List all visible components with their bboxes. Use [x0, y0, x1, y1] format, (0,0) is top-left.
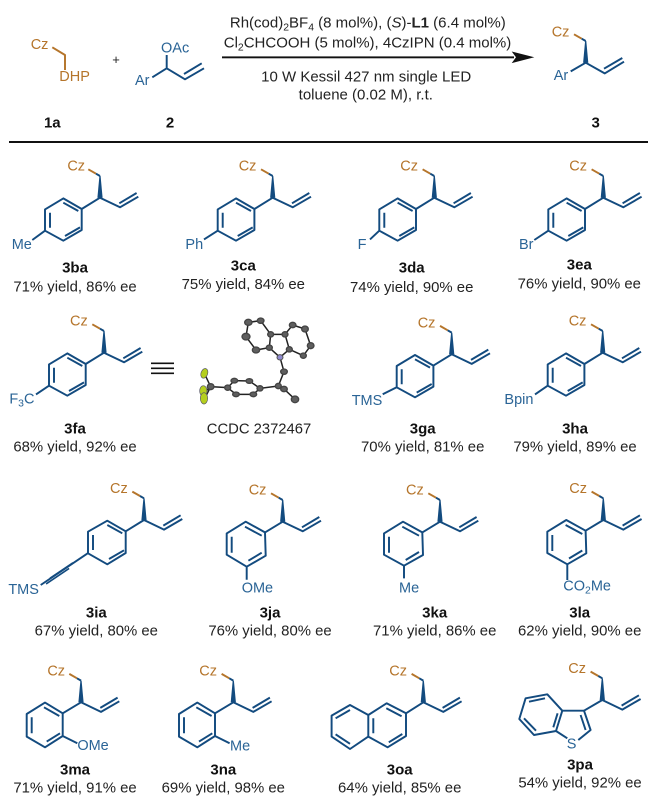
compound 3la: 62% yield, 90% ee	[518, 624, 641, 640]
compound 3ba: 3ba	[62, 259, 89, 276]
compound 3ca: Cz	[239, 159, 256, 175]
reaction conditions above arrow: S)-L1 (6.4 mol%)	[391, 15, 506, 32]
compound 3ma: 3ma	[60, 761, 91, 778]
compound 3ba: Me	[12, 237, 32, 253]
plus sign: +	[112, 52, 120, 67]
compound 3fa	[9, 314, 142, 456]
compound 3ja	[208, 483, 332, 640]
compound 3pa: 3pa	[567, 756, 594, 773]
compound 3fa: F	[9, 391, 18, 407]
compound 3na: 69% yield, 98% ee	[162, 781, 285, 797]
compound 3la: 2	[585, 586, 591, 597]
compound 3ba	[12, 159, 138, 296]
compound 3ja: Cz	[249, 483, 266, 499]
compound 3ea: Br	[519, 237, 534, 253]
compound 3pa: S	[567, 736, 576, 752]
reactant 2	[135, 41, 204, 132]
compound 3ea: 76% yield, 90% ee	[518, 276, 641, 292]
product 3	[552, 25, 624, 132]
reaction conditions above arrow	[224, 15, 511, 54]
compound 3ka: 3ka	[422, 605, 448, 622]
compound 3ma: 71% yield, 91% ee	[13, 781, 137, 797]
reactant 2: Ar	[135, 73, 150, 89]
divider rule	[9, 141, 648, 143]
reaction conditions above arrow: Cl	[224, 35, 238, 52]
compound 3ba: 71% yield, 86% ee	[13, 280, 137, 296]
compound 3ga: 70% yield, 81% ee	[361, 440, 484, 456]
crystal structure	[199, 318, 314, 437]
compound 3oa: 64% yield, 85% ee	[338, 781, 461, 797]
reaction conditions below arrow: 10 W Kessil 427 nm single LED	[261, 69, 471, 86]
compound 3na: Cz	[199, 663, 217, 679]
compound 3ia: 3ia	[86, 605, 107, 622]
reactant 1a: 1a	[44, 115, 61, 132]
compound 3oa: 3oa	[387, 761, 413, 778]
compound 3ia: Cz	[110, 481, 128, 497]
compound 3oa: Cz	[389, 663, 407, 679]
product 3: Cz	[552, 25, 569, 41]
compound 3ja: 76% yield, 80% ee	[208, 624, 332, 640]
compound 3ja: 3ja	[260, 605, 281, 622]
reaction conditions above arrow: 2	[238, 43, 244, 54]
compound 3la: CO	[563, 579, 585, 595]
compound 3oa	[332, 663, 462, 797]
compound 3ca: Ph	[185, 237, 203, 253]
equivalence symbol	[151, 363, 174, 373]
reaction arrow	[222, 52, 534, 63]
compound 3ea: Cz	[569, 159, 587, 175]
compound 3pa	[518, 661, 642, 792]
compound 3ka: Cz	[406, 483, 424, 499]
compound 3fa: 3fa	[64, 420, 86, 437]
compound 3ha: Bpin	[504, 392, 533, 408]
reaction conditions below arrow: toluene (0.02 M), r.t.	[299, 86, 433, 103]
compound 3fa: C	[24, 391, 34, 407]
compound 3na: Me	[230, 738, 250, 754]
compound 3da	[350, 159, 473, 296]
compound 3la	[518, 481, 642, 640]
compound 3ga: 3ga	[410, 420, 436, 437]
compound 3ha: Cz	[569, 314, 586, 330]
compound 3pa: 54% yield, 92% ee	[518, 776, 642, 792]
compound 3ka: Me	[399, 580, 419, 596]
compound 3fa: 3	[18, 398, 24, 409]
compound 3fa: 68% yield, 92% ee	[13, 440, 137, 456]
compound 3ca: 75% yield, 84% ee	[182, 277, 305, 293]
reactant 2: OAc	[161, 41, 189, 57]
compound 3ha: 3ha	[562, 420, 589, 437]
compound 3na: 3na	[210, 761, 237, 778]
compound 3da: F	[358, 237, 367, 253]
reaction conditions above arrow: (8 mol%), (	[314, 15, 391, 32]
compound 3da: Cz	[400, 159, 418, 175]
product 3: 3	[592, 115, 600, 132]
compound 3da: 74% yield, 90% ee	[350, 280, 473, 296]
compound 3la: Cz	[569, 481, 587, 497]
compound 3ha: 79% yield, 89% ee	[513, 440, 637, 456]
reactant 1a: Cz	[31, 37, 48, 53]
compound 3ga: TMS	[352, 393, 382, 409]
reaction conditions above arrow: CHCOOH (5 mol%), 4CzIPN (0.4 mol%)	[244, 35, 511, 52]
compound 3ca: 3ca	[231, 258, 256, 275]
reactant 1a	[31, 37, 90, 132]
crystal structure: CCDC 2372467	[207, 421, 311, 437]
reactant 2: 2	[166, 115, 174, 132]
compound 3ga: Cz	[418, 315, 435, 331]
compound 3ea	[518, 159, 642, 292]
compound 3ia: TMS	[8, 582, 39, 598]
compound 3la: Me	[591, 579, 611, 595]
compound 3ha	[504, 314, 641, 456]
compound 3na	[162, 663, 285, 797]
compound 3ka: 71% yield, 86% ee	[373, 624, 496, 640]
compound 3ga	[352, 315, 490, 456]
product 3: Ar	[554, 68, 568, 84]
compound 3pa: Cz	[568, 661, 586, 677]
compound 3ka	[373, 483, 496, 640]
compound 3ca	[182, 159, 311, 293]
compound 3fa: Cz	[70, 314, 88, 330]
reaction conditions above arrow: 2	[283, 23, 289, 34]
compound 3ja: OMe	[242, 580, 273, 596]
compound 3ma: Cz	[47, 663, 65, 679]
compound 3ia	[8, 481, 182, 640]
compound 3ma: OMe	[77, 738, 109, 754]
compound 3ba: Cz	[67, 159, 85, 175]
compound 3ma	[13, 663, 137, 797]
reaction conditions above arrow: BF	[289, 15, 308, 32]
compound 3la: 3la	[569, 605, 591, 622]
reaction conditions above arrow: 4	[308, 23, 314, 34]
reaction conditions above arrow: Rh(cod)	[230, 15, 283, 32]
reaction conditions below arrow	[261, 69, 471, 103]
compound 3ia: 67% yield, 80% ee	[35, 624, 158, 640]
compound 3da: 3da	[399, 259, 425, 276]
reactant 1a: DHP	[59, 69, 90, 85]
compound 3ea: 3ea	[567, 256, 592, 273]
